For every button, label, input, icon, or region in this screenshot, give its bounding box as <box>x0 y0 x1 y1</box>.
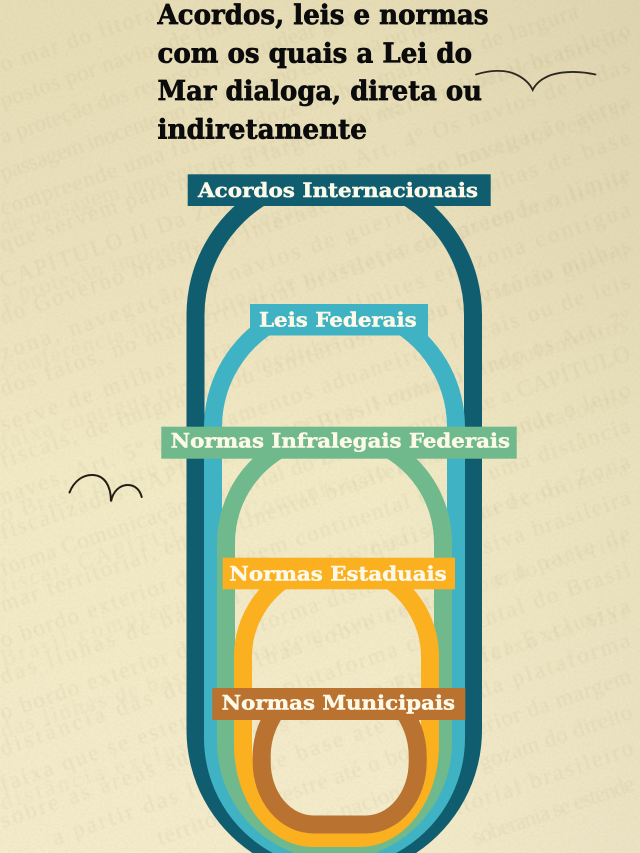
label: Normas Infralegais Federais <box>161 427 517 459</box>
background: aged paper with faint legal text: Brasil compreende o mar territorial, a zona econômica <box>0 455 631 671</box>
diagram: nested tracks <box>186 190 482 853</box>
background: aged paper with faint legal text: naves, Art. 5º e regulamentos aduaneiros, fiscais ou de leis <box>0 269 633 509</box>
background: aged paper with faint legal text: faixa que se estende até a plataforma continental do Brasil <box>0 557 633 797</box>
background: aged paper with faint legal text: todas as nacionalidades gozam do direito <box>258 699 635 850</box>
background: aged paper with faint legal text: a proteção dos recursos por fundear grave <box>0 0 373 149</box>
track: Acordos Internacionais <box>186 190 482 853</box>
background: aged paper with faint legal text: território terrestre até o bordo exterior da margem <box>153 663 634 850</box>
background: aged paper with faint legal text: mar territorial brasileiro <box>363 735 636 850</box>
background: aged paper with faint legal text: o bordo exterior da plataforma distância exclusiva brasileira <box>0 485 633 725</box>
label: Normas Municipais: Normas Municipais <box>222 691 455 714</box>
label: Leis Federais <box>250 304 428 336</box>
background: aged paper with faint legal text: sobre as áreas submarinas da Zona Econômica Exclusiva <box>0 593 633 833</box>
icon: bird top right <box>476 71 596 90</box>
background: aged paper with faint legal text: zona, navegação de navios de guerra das linhas de base <box>0 125 633 365</box>
background: aged paper with faint legal text: o Brasil quatro milhas aduaneiros, sanitários, regulamentos <box>0 311 631 527</box>
background: aged paper with faint legal text: que servem para medir a largura do mar territorial brasileiro <box>0 17 633 257</box>
title: indiretamente <box>158 114 367 146</box>
background: aged paper with faint legal text: fiscalizadas CAPÍTULO IV O Brasil comunicando os Art. 7º <box>0 305 633 545</box>
label: Normas Estaduais <box>223 558 455 589</box>
background: aged paper with faint legal text: fiscais, de imigração ou sanitários, no seu território milhas <box>0 233 633 473</box>
background: aged paper with faint legal text: das linhas de base, a partir das quais se mede da Zona <box>0 449 633 689</box>
title: Mar dialoga, direta ou <box>158 76 482 107</box>
background: aged paper with faint legal text: de passagem inocente no mar territorial de navios públicos direção <box>0 23 631 239</box>
label: Normas Infralegais Federais: Normas Infralegais Federais <box>171 430 510 453</box>
background: aged paper with faint legal text: fiscais CAPÍTULO IV Comunicação Federal da plataforma <box>0 383 631 599</box>
title: Acordos, leis e normas <box>157 0 488 31</box>
label: Acordos Internacionais: Acordos Internacionais <box>197 179 478 202</box>
track: Leis Federais <box>204 320 465 853</box>
background: aged paper with faint legal text: dos fatos, no mar territorial brasileira compreende o limite <box>0 161 633 401</box>
background: aged paper with faint legal text: Conferência internacional de navegação de navios brasileiros <box>0 167 631 383</box>
track: Normas Infralegais Federais <box>217 450 452 853</box>
background: aged paper with faint legal text: forma Comunicação territorial do Brasil compreende a CAPÍTULO <box>0 341 633 581</box>
background: aged paper with faint legal text: faixa contígua tomando medidas para zona navios de guerra <box>0 239 631 455</box>
background: aged paper with faint legal text: das linhas de base, da margem continental e bordo exterior <box>0 527 631 743</box>
track: Normas Estaduais <box>243 575 430 838</box>
background: aged paper with faint legal text: passagem inocente no seu Governo exclusiva ou tenham <box>0 0 477 185</box>
background: aged paper with faint legal text: o bordo exterior da margem continental ou até uma distância <box>0 413 633 653</box>
title: com os quais a Lei do <box>158 38 472 70</box>
label: Acordos Internacionais <box>188 174 491 206</box>
background: aged paper with faint legal text: a partir das linhas de base até limites da plataforma <box>48 627 633 850</box>
label: Leis Federais: Leis Federais <box>259 309 417 332</box>
title <box>157 0 488 146</box>
background: aged paper with faint legal text: compreende uma faixa de doze milhas marítimas de largura <box>0 0 581 221</box>
background: aged paper with faint legal text: do Governo brasileiro internacionalmente navegação aérea <box>0 89 633 329</box>
background: aged paper with faint legal text: distância exclusiva, centrada a partir da faixa do Mar <box>0 599 631 815</box>
background: aged paper with faint legal text: CAPÍTULO II Da Zona Contígua Art. 4º Os navios de todas <box>0 53 633 293</box>
track: Normas Municipais <box>262 705 418 824</box>
label: Normas Municipais <box>212 688 465 720</box>
background: aged paper with faint legal text: mar territorial, em continental brasileira compreende o leito <box>0 377 633 617</box>
background: aged paper with faint legal text: serve de milhas para medir os limites em zona contígua <box>0 197 633 437</box>
label: Normas Estaduais: Normas Estaduais <box>229 563 447 586</box>
icon: bird left <box>70 475 142 502</box>
background: aged paper with faint legal text: distância das doze milhas sobre centrada e a parte de <box>0 521 633 761</box>
background: aged paper with faint legal text: soberania se estende <box>468 771 637 850</box>
background: aged paper with faint legal text: a proteção impostos e navegação de Governo brasileiro regular <box>0 95 631 311</box>
